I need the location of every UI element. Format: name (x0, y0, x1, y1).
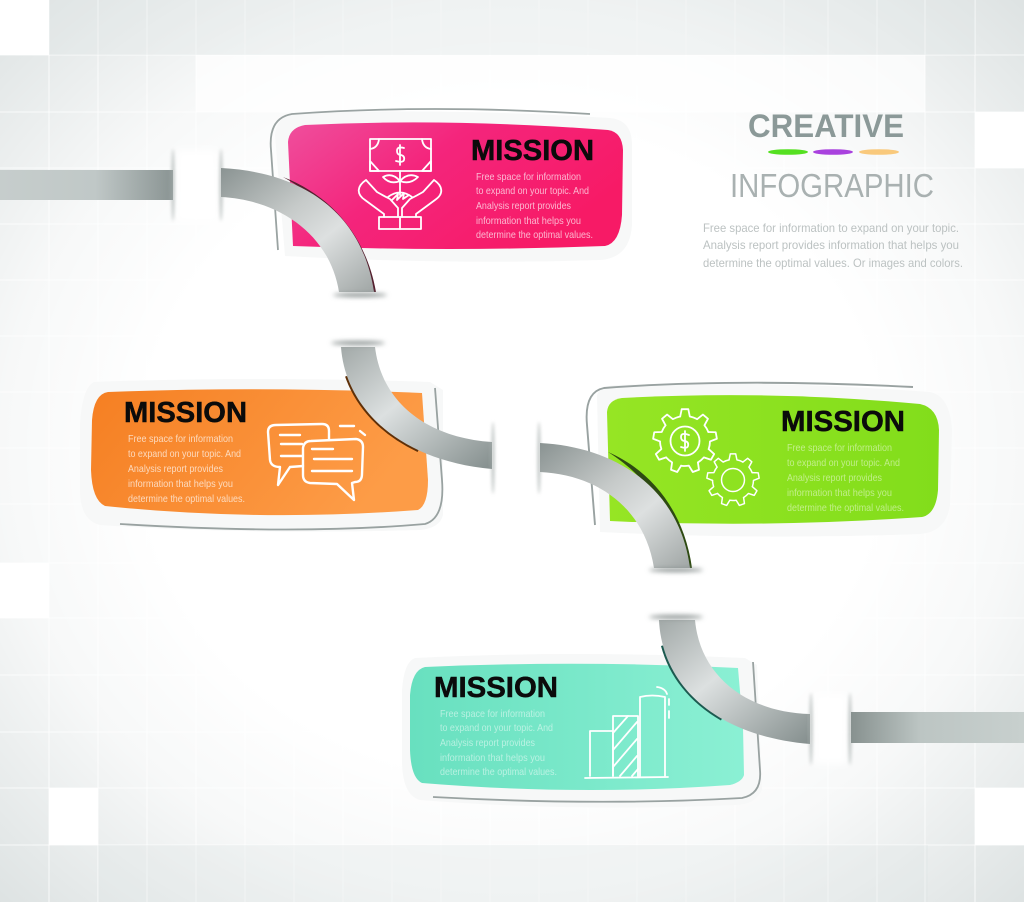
description text (703, 221, 963, 270)
body text: to expand on your topic. And (476, 185, 589, 197)
header block (703, 108, 963, 270)
body text (440, 708, 557, 778)
heading: MISSION (124, 397, 247, 429)
body text: determine the optimal values. (128, 493, 245, 505)
body text: determine the optimal values. (476, 229, 593, 241)
body text: Free space for information (787, 442, 892, 454)
heading: MISSION (781, 406, 905, 438)
body text: to expand on your topic. And (787, 457, 900, 469)
icon: speech bubbles (268, 424, 365, 500)
body text (476, 171, 593, 241)
body text: information that helps you (787, 487, 892, 499)
heading: infographic: INFOGRAPHIC (730, 167, 934, 204)
body text: Analysis report provides (476, 200, 571, 212)
body text: Analysis report provides (128, 463, 223, 475)
body text: Analysis report provides (440, 737, 535, 749)
arrow: connector curve one (221, 168, 387, 297)
icon: money plant in hands (359, 139, 441, 229)
body text: to expand on your topic. And (128, 448, 241, 460)
body text: determine the optimal values. (440, 766, 557, 778)
panel: pink mission card (271, 109, 632, 262)
icon: bar chart (585, 687, 669, 778)
colour accent dashes (768, 149, 899, 155)
arrow: left entry bar (0, 149, 223, 222)
arrow: connector curve two (331, 341, 541, 494)
description text: Free space for information to expand on your topic. (703, 221, 959, 235)
body text: Free space for information (476, 171, 581, 183)
body text: determine the optimal values. (787, 502, 904, 514)
body text: Free space for information (128, 433, 233, 445)
panel: green mission card (587, 383, 952, 537)
body text: Free space for information (440, 708, 545, 720)
body text: to expand on your topic. And (440, 722, 553, 734)
body text (787, 442, 904, 514)
body text: information that helps you (476, 215, 581, 227)
arrow: connector curve four (649, 615, 852, 765)
body text: Analysis report provides (787, 472, 882, 484)
body text (128, 433, 245, 505)
description text: determine the optimal values. Or images and colors. (703, 256, 963, 270)
panel: orange mission card (80, 379, 443, 532)
body text: information that helps you (440, 752, 545, 764)
body text: information that helps you (128, 478, 233, 490)
panel: teal mission card (402, 654, 762, 808)
arrow: right exit bar (851, 712, 1024, 743)
heading: creative: CREATIVE (748, 108, 904, 144)
description text: Analysis report provides information that helps you (703, 238, 959, 252)
heading: MISSION (434, 672, 558, 704)
icon: gears with dollar (651, 409, 760, 508)
arrow: connector curve three (540, 443, 703, 572)
heading: MISSION (471, 135, 594, 167)
